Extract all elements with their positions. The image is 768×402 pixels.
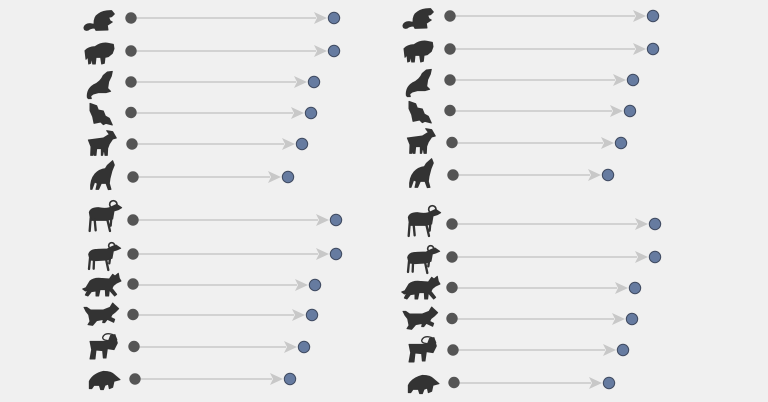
arrow: fox [446,313,638,325]
arrow: bat [444,105,636,117]
icon: bighorn ram [408,206,441,236]
arrow: goat [126,138,308,150]
arrow: goat [446,137,627,149]
icon: sheep [408,246,440,273]
icon: fox [403,307,438,329]
icon: fox [84,303,119,325]
arrow: bison [444,43,659,55]
icon: coyote [83,273,121,296]
arrow: bat [125,107,317,119]
arrow: beaver [125,12,340,24]
icon: ibex [90,334,117,359]
arrow: sheep [446,251,661,263]
arrow: bighorn ram [127,214,342,226]
arrow: boar [448,377,615,389]
icon: goat [407,129,435,153]
icon: bighorn ram [89,201,122,231]
panel: right chart [402,9,661,394]
icon: boar [89,371,120,390]
arrow: beaver [444,10,659,22]
icon: wolf [91,161,114,190]
icon: bison [404,41,433,62]
arrow: bighorn ram [446,218,661,230]
icon: boar [408,375,439,394]
icon: goat [88,131,116,155]
icon: seal [87,71,112,99]
arrow: seal [444,74,639,86]
arrow: coyote [127,278,321,291]
arrow: bison [125,45,340,57]
arrow: wolf [447,169,614,181]
arrow: sheep [127,248,342,260]
arrow: fox [127,309,318,321]
arrow: ibex [447,344,629,356]
icon: beaver [403,9,433,28]
icon: coyote [402,276,440,299]
panel: left chart [83,11,342,390]
arrow: seal [125,76,320,88]
icon: bison [85,43,114,64]
arrow: boar [129,373,296,385]
icon: bat [409,101,431,123]
icon: ibex [409,337,436,362]
icon: seal [406,69,431,97]
arrow: ibex [128,341,310,353]
icon: beaver [84,11,114,30]
arrow: wolf [127,171,294,183]
icon: wolf [410,159,433,188]
arrow: coyote [446,282,641,294]
icon: sheep [89,243,121,270]
icon: bat [90,103,112,125]
